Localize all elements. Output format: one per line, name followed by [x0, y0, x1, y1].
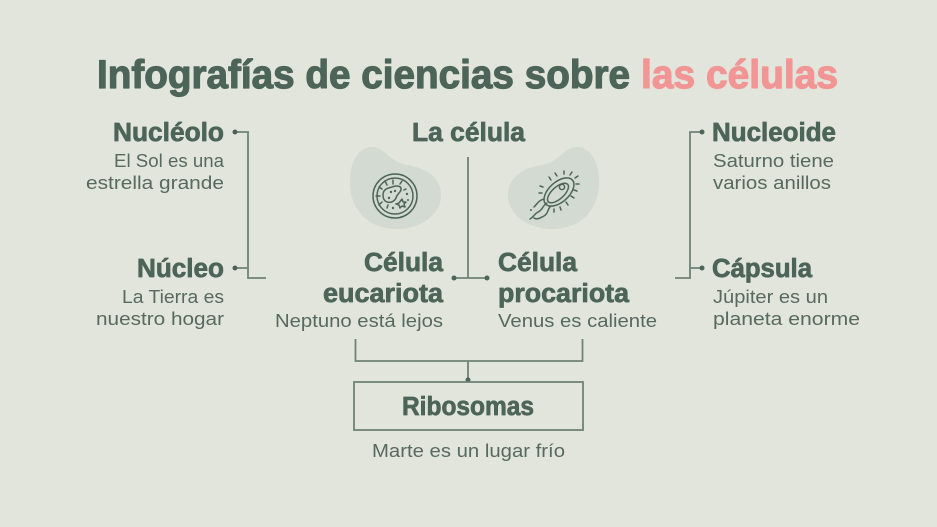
- text block: Nucleoide: Nucleoide: [712, 119, 836, 147]
- text block: Nucleoide: Saturno tiene: [713, 150, 834, 171]
- icon: petri dish with microorganisms: [350, 147, 441, 229]
- text block: Nucléolo: [86, 119, 225, 193]
- text block: Nucléolo: El Sol es una: [114, 150, 225, 171]
- title: las células: [641, 53, 838, 97]
- heading: La célula: La célula: [412, 119, 526, 147]
- text block: Núcleo: Núcleo: [137, 255, 224, 283]
- text block: Núcleo: La Tierra es: [122, 286, 224, 307]
- text block: Nucléolo: Nucléolo: [113, 119, 224, 147]
- text block: Núcleo: [96, 255, 224, 329]
- connector: central branch: [452, 157, 490, 280]
- text block: Célula procariota: [498, 249, 657, 331]
- box: Ribosomas: Ribosomas: [402, 393, 534, 421]
- text block: Cápsula: planeta enorme: [713, 308, 860, 329]
- text block: Cápsula: Júpiter es un: [713, 286, 828, 307]
- caption: Ribosomas: Marte es un lugar frío: [372, 440, 565, 461]
- text block: Célula procariota: Venus es caliente: [498, 310, 657, 331]
- text block: Célula eucariota: [275, 249, 444, 331]
- text block: Cápsula: Cápsula: [712, 255, 813, 283]
- text block: Célula eucariota: eucariota: [323, 280, 444, 308]
- icon: bacterium: [508, 147, 599, 229]
- box: Ribosomas: [354, 382, 583, 430]
- text block: Cápsula: [712, 255, 860, 329]
- connector: lower bracket: [356, 339, 582, 382]
- text block: Nucleoide: varios anillos: [713, 172, 831, 193]
- text block: Nucleoide: [712, 119, 836, 193]
- text block: Célula eucariota: Neptuno está lejos: [275, 310, 443, 331]
- text block: Célula procariota: Célula: [498, 249, 578, 277]
- text block: Célula eucariota: Célula: [364, 249, 444, 277]
- text block: Núcleo: nuestro hogar: [96, 308, 224, 329]
- connector: right bracket: [675, 130, 704, 278]
- title: Infografías de ciencias sobre: [97, 53, 630, 97]
- connector: left bracket: [232, 130, 266, 278]
- text block: Célula procariota: procariota: [498, 280, 630, 308]
- text block: Nucléolo: estrella grande: [86, 172, 224, 193]
